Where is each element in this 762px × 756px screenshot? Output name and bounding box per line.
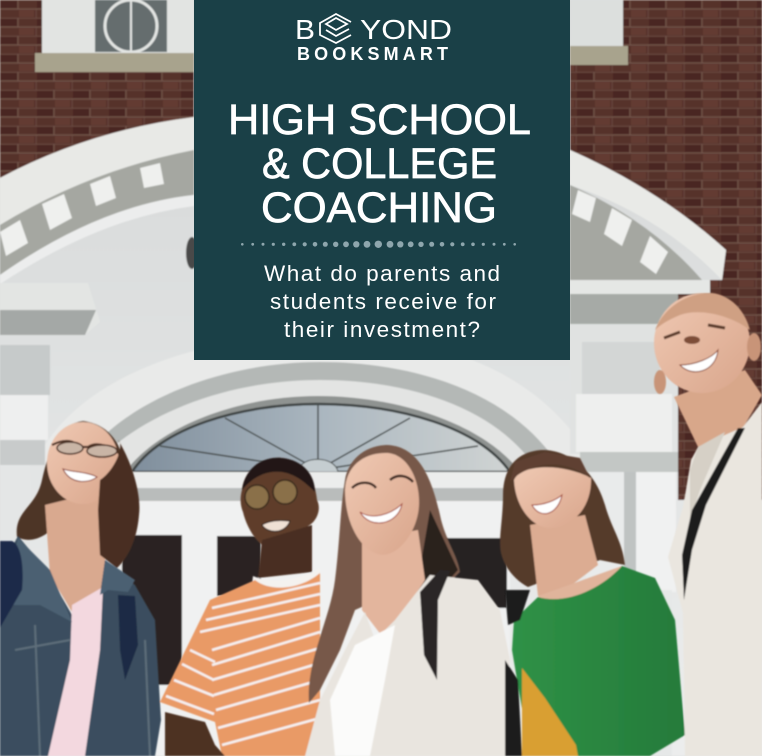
heading: & COLLEGE [262,140,497,188]
heading: HIGH SCHOOL [228,96,531,144]
subtitle [264,261,500,342]
logo: Beyond BookSmart: YOND [360,14,452,45]
subtitle: students receive for [270,289,496,314]
person: woman in white hoodie [305,445,510,756]
left column and entablature [0,283,100,545]
arched fanlight [132,404,510,472]
door arch [45,335,582,500]
person: man in striped shirt [160,458,320,756]
subtitle: their investment? [284,317,480,342]
heading: COACHING [261,184,497,232]
heading [228,96,531,232]
icon: book hexagon [320,14,351,43]
pediment right [570,150,726,280]
right pilaster and columns [570,280,710,756]
logo: Beyond BookSmart: B [295,14,315,45]
person: tall man with strap [654,293,762,756]
person: woman in green top [500,450,685,756]
title panel [194,0,570,360]
door frame [122,472,510,756]
brick wall right [570,0,762,500]
person: woman with glasses and denim jacket [0,421,161,756]
people group [0,293,762,756]
logo: Beyond BookSmart [295,14,452,64]
upper window right [570,0,628,65]
dotted divider [241,241,516,248]
subtitle: What do parents and [264,261,500,286]
logo: Beyond BookSmart: BOOKSMART [297,44,448,64]
upper window left [35,0,194,72]
pediment left [0,117,198,284]
brick wall left [0,0,194,178]
